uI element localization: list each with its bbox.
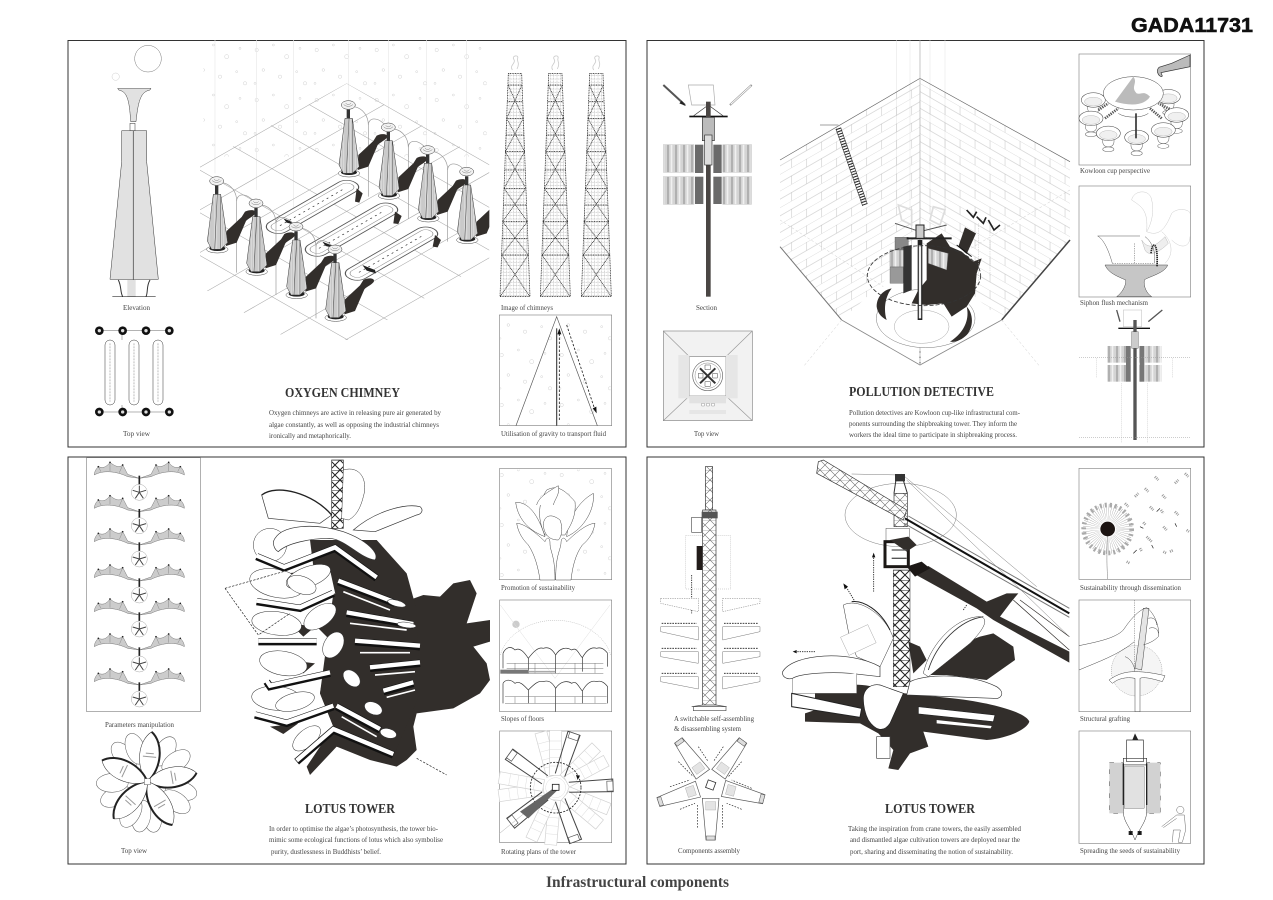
self-assembling system bbox=[661, 467, 760, 711]
label: top view: Top view bbox=[121, 847, 148, 855]
label: slopes: Slopes of floors bbox=[501, 715, 544, 723]
label: switchable system: & disassembling system bbox=[674, 725, 742, 733]
description: pollution detective: workers the ideal time to participate in shipbreaking process. bbox=[849, 430, 1017, 439]
sustainability through dissemination bbox=[1079, 468, 1191, 579]
climbing frame bbox=[886, 528, 909, 542]
center petal bbox=[863, 685, 903, 729]
crane shadow bbox=[913, 566, 1069, 663]
panel: lotus tower crane bbox=[647, 457, 1204, 864]
round pool bbox=[876, 288, 975, 348]
structural grafting bbox=[1079, 600, 1191, 712]
mast bbox=[332, 460, 343, 528]
front row chimneys bbox=[207, 177, 374, 321]
elevation drawing bbox=[110, 45, 161, 297]
label: top view: Top view bbox=[123, 430, 151, 438]
code: GADA11731: GADA11731 bbox=[1131, 15, 1253, 37]
right petal bbox=[923, 617, 985, 677]
label: spreading seeds: Spreading the seeds of sustainability bbox=[1080, 847, 1180, 855]
jib bbox=[817, 460, 907, 520]
isometric detective room bbox=[780, 40, 1070, 367]
kowloon cup perspective bbox=[1079, 54, 1191, 165]
description: lotus tower: mimic some ecological functions of lotus which also symbolise bbox=[269, 835, 444, 844]
description: oxygen chimney bbox=[269, 408, 441, 440]
panel: oxygen chimney bbox=[68, 40, 626, 448]
description: lotus tower crane: and dismantled algae cultivation towers are deployed near the bbox=[850, 835, 1021, 844]
label: rotating plans: Rotating plans of the tower bbox=[501, 848, 577, 856]
rotating plans bbox=[498, 730, 613, 845]
label: components assembly: Components assembly bbox=[678, 847, 740, 855]
top view square bbox=[663, 331, 752, 421]
description: lotus tower crane bbox=[848, 824, 1021, 856]
image of chimneys bbox=[500, 56, 611, 297]
description: lotus tower: In order to optimise the algae’s photosynthesis, the tower bio- bbox=[269, 824, 438, 833]
label: elevation: Elevation bbox=[123, 304, 150, 312]
crane tower axonometric bbox=[783, 460, 1069, 770]
petals front bbox=[273, 526, 416, 740]
description: oxygen chimney: algae constantly, as well as opposing the industrial chimneys bbox=[269, 420, 439, 429]
mast bbox=[893, 570, 910, 687]
description: lotus tower crane: port, sharing and disseminating the notion of sustainability. bbox=[850, 847, 1013, 856]
siphon flush mechanism bbox=[1079, 186, 1191, 297]
section with arrows bbox=[1079, 310, 1190, 443]
caption: infrastructural components: Infrastructural components bbox=[546, 874, 729, 891]
back row chimneys bbox=[338, 101, 506, 244]
label: image of chimneys: Image of chimneys bbox=[501, 304, 553, 312]
cast shadow bbox=[912, 233, 982, 317]
description: pollution detective: Pollution detectives are Kowloon cup-like infrastructural com- bbox=[849, 408, 1020, 417]
crane guide ellipse and cables bbox=[845, 474, 1069, 637]
label: top view: Top view bbox=[694, 430, 720, 438]
parameters manipulation bbox=[87, 458, 200, 712]
description: lotus tower: purity, dustlessness in Buddhists’ belief. bbox=[271, 847, 381, 856]
tower shadow bbox=[307, 580, 490, 775]
back petal bbox=[843, 603, 893, 667]
spreading the seeds bbox=[1079, 731, 1191, 843]
description: oxygen chimney: Oxygen chimneys are active in releasing pure air generated by bbox=[269, 408, 441, 417]
label: dissemination: Sustainability through dissemination bbox=[1080, 584, 1181, 592]
description: oxygen chimney: ironically and metaphorically. bbox=[269, 431, 351, 440]
left petal bbox=[783, 656, 880, 679]
label: promotion: Promotion of sustainability bbox=[501, 584, 575, 592]
promotion of sustainability bbox=[499, 469, 612, 580]
ladder bbox=[820, 125, 867, 206]
slopes of floors bbox=[500, 600, 612, 712]
description: pollution detective bbox=[849, 408, 1020, 439]
floor strips bbox=[255, 547, 420, 762]
components assembly bbox=[656, 736, 766, 840]
boom bbox=[905, 518, 1069, 613]
small cups bbox=[967, 210, 1000, 230]
description: lotus tower bbox=[269, 824, 444, 856]
isometric chimney field bbox=[200, 40, 490, 340]
description: pollution detective: ponents surrounding the shipbreaking tower. They inform the bbox=[849, 419, 1018, 428]
label: siphon: Siphon flush mechanism bbox=[1080, 299, 1149, 307]
title: lotus tower: LOTUS TOWER bbox=[885, 802, 976, 817]
title: pollution detective: POLLUTION DETECTIVE bbox=[849, 385, 994, 400]
panel: lotus tower biomimicry bbox=[68, 457, 626, 864]
label: kowloon cup: Kowloon cup perspective bbox=[1080, 167, 1150, 175]
gravity diagram bbox=[499, 315, 612, 426]
lotus tower axonometric bbox=[225, 460, 490, 775]
detective tower bbox=[890, 205, 952, 320]
label: switchable system bbox=[674, 715, 754, 733]
panel: pollution detective bbox=[647, 40, 1204, 447]
label: parameters: Parameters manipulation bbox=[105, 721, 174, 729]
label: grafting: Structural grafting bbox=[1080, 715, 1130, 723]
title: lotus tower: LOTUS TOWER bbox=[305, 802, 396, 817]
top view plan bbox=[95, 326, 174, 416]
mid right petal bbox=[907, 676, 1002, 699]
label: section: Section bbox=[696, 304, 717, 312]
movement arrows bbox=[795, 555, 967, 652]
label: gravity: Utilisation of gravity to transport fluid bbox=[501, 430, 606, 438]
lotus top view bbox=[96, 731, 199, 834]
petals left and back bbox=[247, 469, 422, 756]
description: lotus tower crane: Taking the inspiration from crane towers, the easily assembled bbox=[848, 824, 1021, 833]
section drawing bbox=[663, 85, 752, 297]
algae troughs bbox=[262, 178, 442, 283]
label: switchable system: A switchable self-assembling bbox=[674, 715, 754, 723]
title: oxygen chimney: OXYGEN CHIMNEY bbox=[285, 386, 400, 401]
